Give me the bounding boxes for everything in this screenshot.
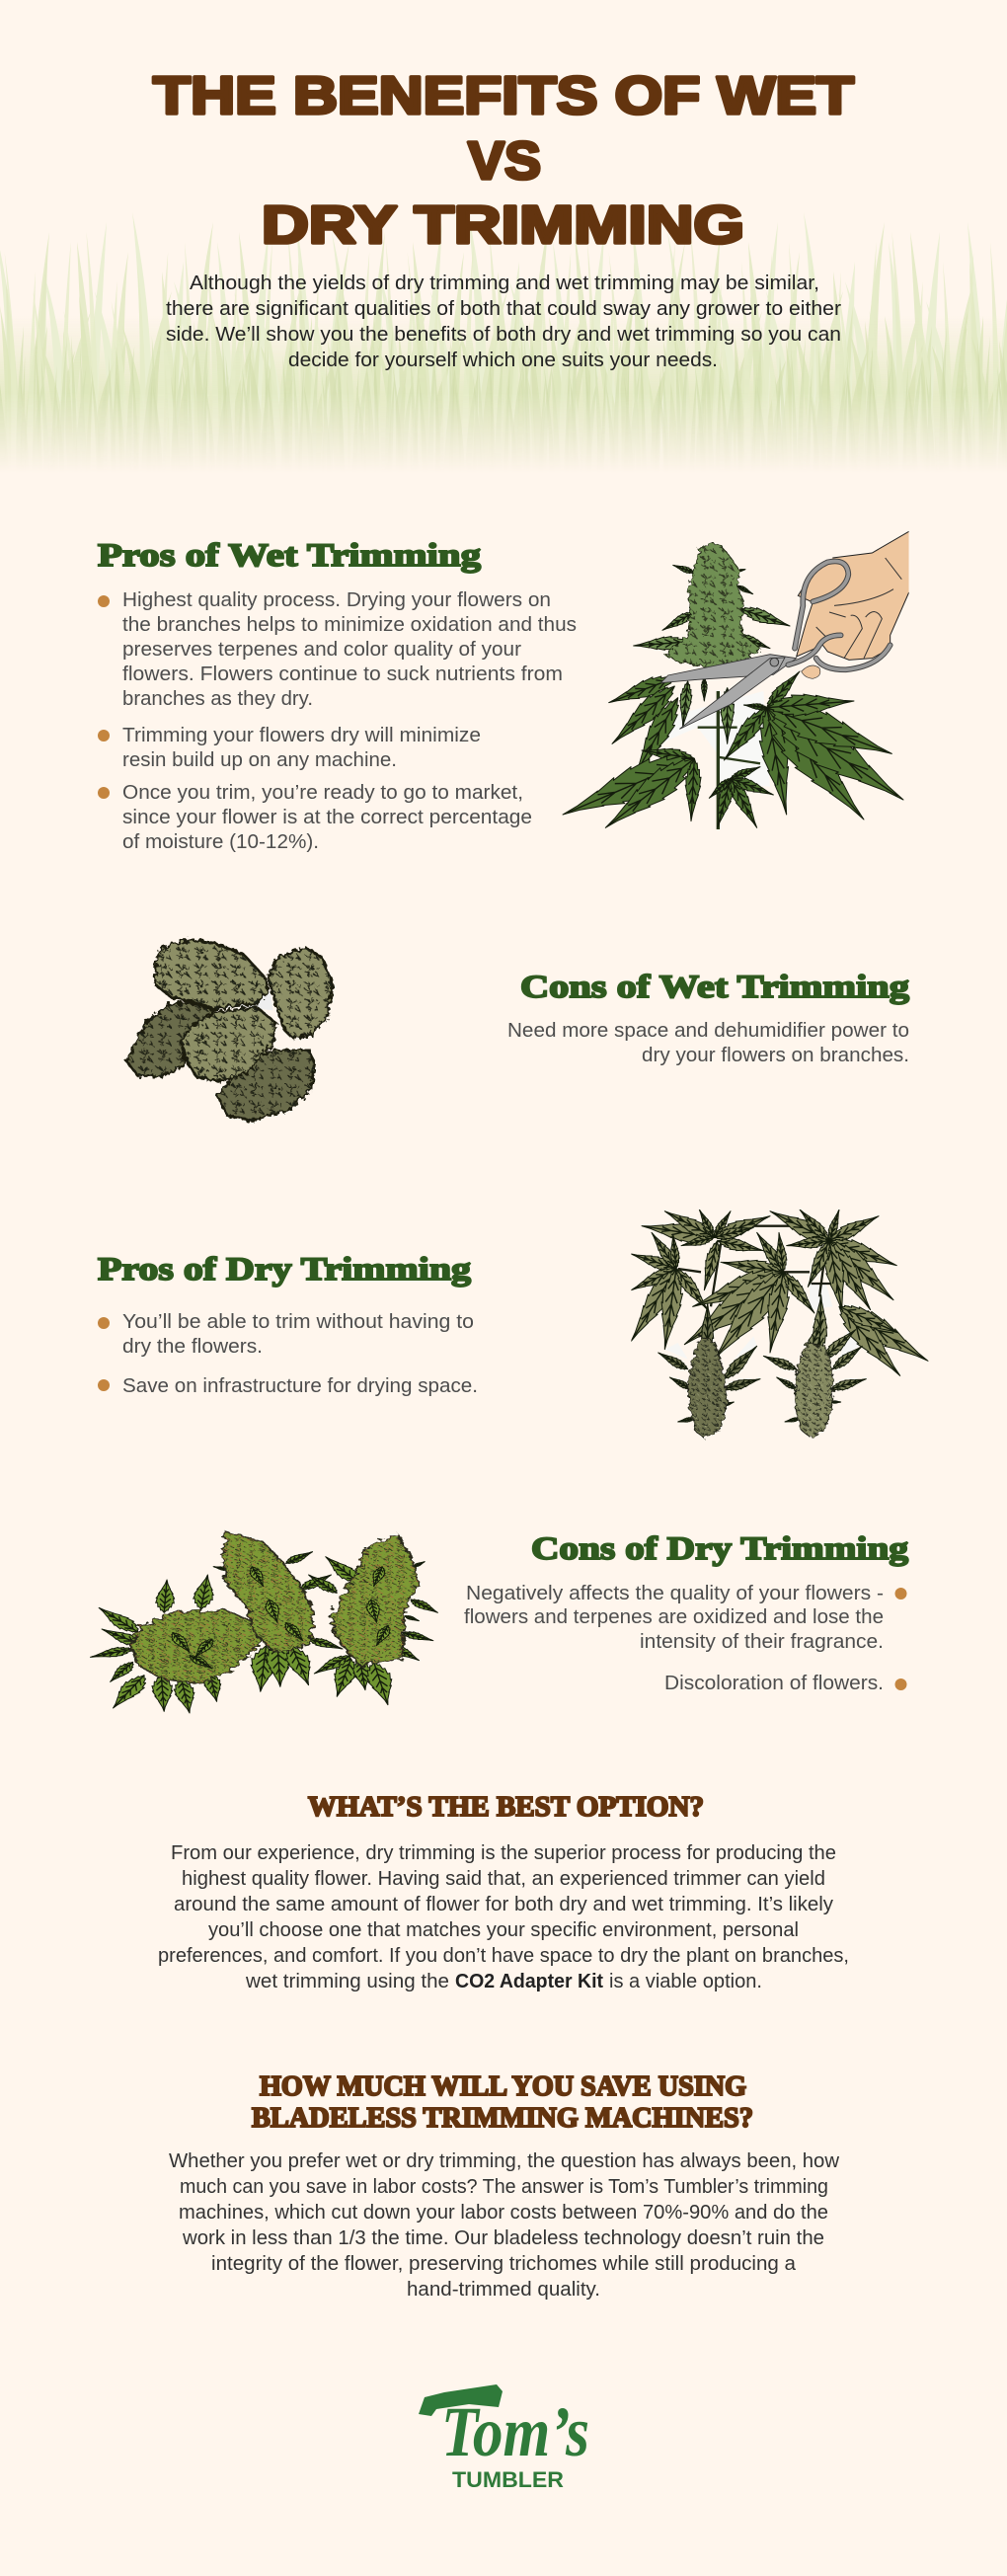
grass background xyxy=(0,213,1007,463)
logo: Tom's Tumbler: TUMBLER xyxy=(452,2467,564,2492)
text: savings paragraph: much can you save in labor costs? The answer is Tom’s Tumbler’s trimming xyxy=(180,2176,828,2198)
title: DRY TRIMMING xyxy=(262,195,744,255)
text: cons of wet: Need more space and dehumidifier power to xyxy=(507,1020,909,1042)
heading: pros of dry trimming: Pros of Dry Trimming xyxy=(98,1252,472,1288)
text: savings paragraph xyxy=(169,2150,840,2301)
bullet list: pros of wet: of moisture (10-12%). xyxy=(122,831,319,853)
heading: how much will you save xyxy=(252,2071,753,2134)
bullet list: pros of dry: You’ll be able to trim without having to xyxy=(122,1311,474,1333)
text: savings paragraph: hand-trimmed quality. xyxy=(407,2279,600,2301)
bullet list: pros of dry xyxy=(98,1311,478,1397)
bullet list: cons of dry: flowers and terpenes are oxidized and lose the xyxy=(464,1606,884,1628)
logo: Tom's Tumbler: Tom’s xyxy=(441,2392,589,2471)
heading: what's the best option: WHAT’S THE BEST OPTION? xyxy=(308,1792,704,1823)
bullet list: pros of wet: resin build up on any machine. xyxy=(122,749,397,771)
heading: how much will you save: HOW MUCH WILL YOU SAVE USING xyxy=(260,2071,746,2102)
bullet list: pros of wet xyxy=(98,589,577,853)
text: savings paragraph: integrity of the flower, preserving trichomes while still producing a xyxy=(211,2253,797,2275)
bullet list: pros of wet: flowers. Flowers continue to suck nutrients from xyxy=(122,664,563,685)
bullet list: pros of wet: branches as they dry. xyxy=(122,688,313,710)
heading: how much will you save: BLADELESS TRIMMING MACHINES? xyxy=(252,2103,753,2134)
heading: pros of wet trimming: Pros of Wet Trimming xyxy=(98,538,482,574)
bullet list: pros of wet: Highest quality process. Drying your flowers on xyxy=(122,589,551,611)
text: savings paragraph: machines, which cut down your labor costs between 70%-90% and do the xyxy=(179,2202,828,2224)
text: savings paragraph: work in less than 1/3 the time. Our bladeless technology doesn’t ruin the xyxy=(182,2227,824,2249)
intro text: side. We’ll show you the benefits of both dry and wet trimming so you can xyxy=(166,324,841,346)
text: cons of wet: dry your flowers on branches. xyxy=(642,1045,909,1066)
illustration: hand with scissors trimming plant xyxy=(556,531,914,838)
text: savings paragraph: Whether you prefer wet or dry trimming, the question has always been, how xyxy=(169,2150,840,2172)
title: VS xyxy=(468,131,541,191)
bullet list: pros of wet: preserves terpenes and color quality of your xyxy=(122,639,521,661)
intro text: Although the yields of dry trimming and wet trimming may be similar, xyxy=(190,273,819,294)
title xyxy=(153,66,854,255)
heading: cons of wet trimming: Cons of Wet Trimming xyxy=(520,970,910,1005)
text: best option paragraph: is a viable option. xyxy=(609,1971,762,1992)
bullet list: cons of dry: intensity of their fragrance. xyxy=(640,1631,884,1653)
text: best option paragraph xyxy=(158,1842,849,1992)
heading: cons of dry trimming: Cons of Dry Trimming xyxy=(531,1531,909,1567)
intro text xyxy=(166,273,841,371)
text: best option paragraph: wet trimming using the xyxy=(245,1971,449,1992)
text: cons of wet xyxy=(507,1020,909,1066)
bullet list: pros of wet: since your flower is at the correct percentage xyxy=(122,807,532,828)
logo: Tom's Tumbler xyxy=(419,2384,589,2492)
text: best option paragraph: CO2 Adapter Kit xyxy=(455,1971,603,1992)
bullet list: cons of dry xyxy=(464,1583,906,1694)
illustration: green flower buds xyxy=(88,1532,441,1714)
bullet list: cons of dry: Discoloration of flowers. xyxy=(664,1673,884,1694)
bullet list: pros of wet: Trimming your flowers dry will minimize xyxy=(122,725,481,746)
panel: cons of dry trimming xyxy=(464,1531,909,1694)
title: THE BENEFITS OF WET xyxy=(153,66,854,125)
section: what's the best option xyxy=(158,1792,849,1992)
text: best option paragraph: highest quality flower. Having said that, an experienced trimmer can yield xyxy=(182,1868,825,1890)
panel: pros of dry trimming xyxy=(98,1252,478,1397)
panel: pros of wet trimming xyxy=(98,538,577,853)
section: how much will you save xyxy=(169,2071,840,2301)
intro text: decide for yourself which one suits your needs. xyxy=(288,350,718,371)
panel: cons of wet trimming xyxy=(507,970,910,1066)
text: best option paragraph: From our experience, dry trimming is the superior process for producing the xyxy=(171,1842,836,1864)
text: best option paragraph: you’ll choose one that matches your specific environment, personal xyxy=(208,1919,799,1941)
bullet list: pros of wet: the branches helps to minimize oxidation and thus xyxy=(122,614,577,636)
illustration: hanging drying plants xyxy=(622,1204,935,1439)
text: best option paragraph: preferences, and comfort. If you don’t have space to dry the plant on branches, xyxy=(158,1945,849,1967)
bullet list: pros of dry: dry the flowers. xyxy=(122,1336,263,1358)
intro text: there are significant qualities of both that could sway any grower to either xyxy=(166,298,841,320)
bullet list: pros of wet: Once you trim, you’re ready to go to market, xyxy=(122,782,523,804)
text: best option paragraph: around the same amount of flower for both dry and wet trimming. It’s likely xyxy=(174,1894,833,1915)
illustration: dried buds xyxy=(126,940,333,1121)
bullet list: pros of dry: Save on infrastructure for drying space. xyxy=(122,1375,478,1397)
bullet list: cons of dry: Negatively affects the quality of your flowers - xyxy=(466,1583,884,1604)
